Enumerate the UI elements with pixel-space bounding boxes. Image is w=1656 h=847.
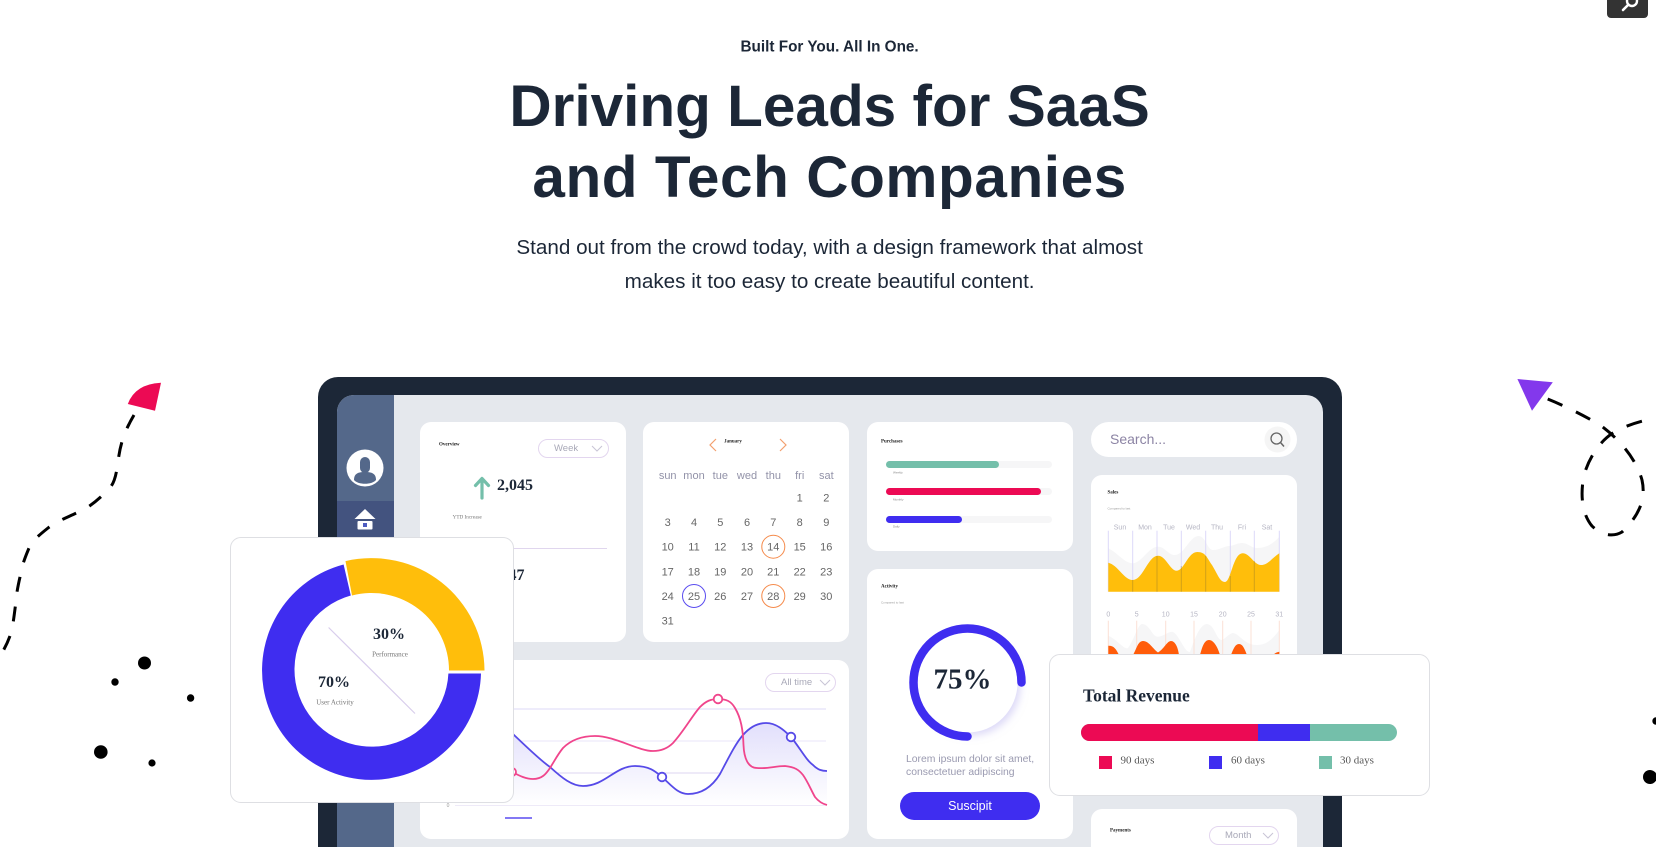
calendar grid: thu [766,470,781,482]
calendar grid: tue [713,470,728,482]
legend label: 60 days [1231,754,1265,766]
all time dropdown [765,673,836,692]
purchases heading: Purchases [881,440,903,444]
panel: calendar [643,422,849,642]
activity description: consectetuer adipiscing [906,766,1015,778]
stacked revenue bar [1081,724,1397,741]
calendar grid: 31 [662,616,674,628]
calendar grid: wed [736,470,757,482]
left decoration: dots [94,656,194,767]
donut divider line [329,627,415,713]
week dropdown [538,439,609,458]
calendar grid: 7 [770,517,776,529]
sales charts [1106,524,1283,654]
calendar grid: 1 [797,492,803,504]
title: and Tech Companies [532,145,1127,210]
calendar grid: 13 [741,542,753,554]
gauge: 75 percent [909,624,1026,741]
legend label: 90 days [1120,754,1154,766]
right decoration: dots [1643,717,1656,784]
panel: sales [1091,475,1297,665]
calendar grid: 2 [823,492,829,504]
panel: activity [867,569,1073,839]
sales charts: 31 [1275,612,1283,618]
progress bar: red [886,488,1052,495]
all time dropdown: All time [781,677,812,688]
dashed trail [0,415,134,656]
legend: 30 days [1318,756,1332,769]
icon: purple triangle [1517,379,1553,411]
revenue heading: Total Revenue [1083,685,1190,705]
donut chart [262,558,484,780]
calendar grid: 8 [797,517,803,529]
calendar grid: 30 [820,591,832,603]
calendar grid: 6 [744,517,750,529]
donut label: 30 percent: 30% [373,626,405,643]
sales subheading: Compared to last [1108,506,1130,510]
calendar grid: 21 [767,566,779,578]
icon: user avatar [346,450,384,486]
calendar grid: 22 [794,566,806,578]
legend: 60 days [1209,756,1222,769]
calendar grid: 5 [717,517,723,529]
calendar grid: 3 [665,517,671,529]
payments heading: Payments [1110,828,1131,833]
icon: green up arrow [474,476,490,500]
month label: January [724,440,742,444]
sales charts: 0 [1106,612,1110,618]
bar label: Weekly [893,470,903,474]
calendar grid: mon [683,470,705,482]
right decoration: triangle and dashed loop [1518,379,1645,536]
calendar grid: 12 [714,542,726,554]
calendar grid: 10 [662,542,674,554]
eyebrow: Built For You. All In One. [740,38,919,55]
progress bar: green [886,460,1052,468]
dashboard screen [337,395,1323,847]
month dropdown: Month [1225,830,1251,841]
calendar grid: 24 [662,591,674,603]
panel: line chart [420,660,849,839]
sales charts: Tue [1163,524,1175,532]
calendar grid: fri [795,470,804,482]
calendar grid: 4 [691,517,697,529]
left decoration: kite and dashed trail [2,382,161,650]
title [509,74,1150,210]
panel: total revenue [1049,654,1430,796]
overview divider [440,548,607,549]
activity heading: Activity [881,584,898,590]
calendar grid: 29 [794,591,806,603]
button [900,792,1040,820]
donut caption: performance: Performance [372,650,408,658]
calendar grid: 23 [820,566,832,578]
sales charts: 15 [1190,612,1198,618]
subtitle: makes it too easy to create beautiful content. [625,270,1035,292]
bar label: Monthly [893,498,904,502]
calendar grid: 9 [823,517,829,529]
calendar grid: 20 [741,566,753,578]
icon: home [354,509,376,530]
activity subheading: Compared to last [881,600,904,604]
sales charts: Mon [1138,524,1152,532]
sales charts: Wed [1186,524,1200,532]
device frame [318,377,1342,847]
calendar grid: 16 [820,542,832,554]
calendar grid: 19 [714,566,726,578]
panel: donut card [230,536,514,802]
stat: 2,045: 2,045 [497,477,533,494]
month dropdown [1209,826,1279,845]
calendar grid: 28 [767,591,779,603]
calendar grid: 26 [714,591,726,603]
sales charts: Sat [1262,524,1272,532]
legend: 90 days [1099,756,1112,769]
calendar grid: sun [659,470,677,482]
dashed loop [1548,399,1656,535]
sales charts: Fri [1238,524,1247,532]
button: Suscipit [948,799,992,813]
search bar [1091,422,1297,457]
title: Driving Leads for SaaS [509,74,1150,139]
activity description [906,754,1034,778]
icon: pink fan [128,383,161,411]
subtitle: Stand out from the crowd today, with a design framework that almost [516,236,1143,259]
panel: purchases [867,422,1073,551]
legend label: 30 days [1340,754,1374,766]
top-right search tile [1607,0,1648,18]
sales charts: Sun [1114,524,1126,532]
overview heading: Overview [439,442,460,448]
calendar grid: 14 [767,542,779,554]
sales charts: 10 [1162,612,1170,618]
icon: magnifier [1264,426,1290,452]
panel: overview [420,422,626,642]
calendar grid: sat [819,470,834,482]
active nav item [337,501,394,557]
sales heading: Sales [1108,490,1118,496]
calendar grid: 27 [741,591,753,603]
subtitle [516,236,1143,292]
bar label: Daily [893,524,900,528]
stat: clipped value: 1,247 [488,567,524,584]
calendar navigation [709,438,787,452]
activity description: Lorem ipsum dolor sit amet, [906,754,1034,764]
gauge value: 75% [934,664,992,696]
YTD label: YTD Increase [453,514,482,520]
donut caption: user activity: User Activity [316,698,354,706]
sales charts: 5 [1135,612,1139,618]
line chart [446,694,828,819]
calendar grid: 11 [688,542,700,554]
calendar grid: 17 [662,566,674,578]
donut label: 70 percent: 70% [318,674,350,691]
sales charts: 20 [1219,612,1227,618]
line chart: 0 [447,803,450,809]
calendar grid: 25 [688,591,700,603]
week dropdown: Week [554,443,578,454]
sidebar [337,395,394,847]
search placeholder: Search... [1110,431,1166,447]
calendar grid: 18 [688,566,700,578]
panel: payments [1091,809,1297,847]
sales charts: Thu [1211,524,1223,532]
sales charts: 25 [1247,612,1255,618]
progress bar: blue [886,516,1052,523]
calendar grid: 15 [794,542,806,554]
calendar grid [659,470,834,628]
